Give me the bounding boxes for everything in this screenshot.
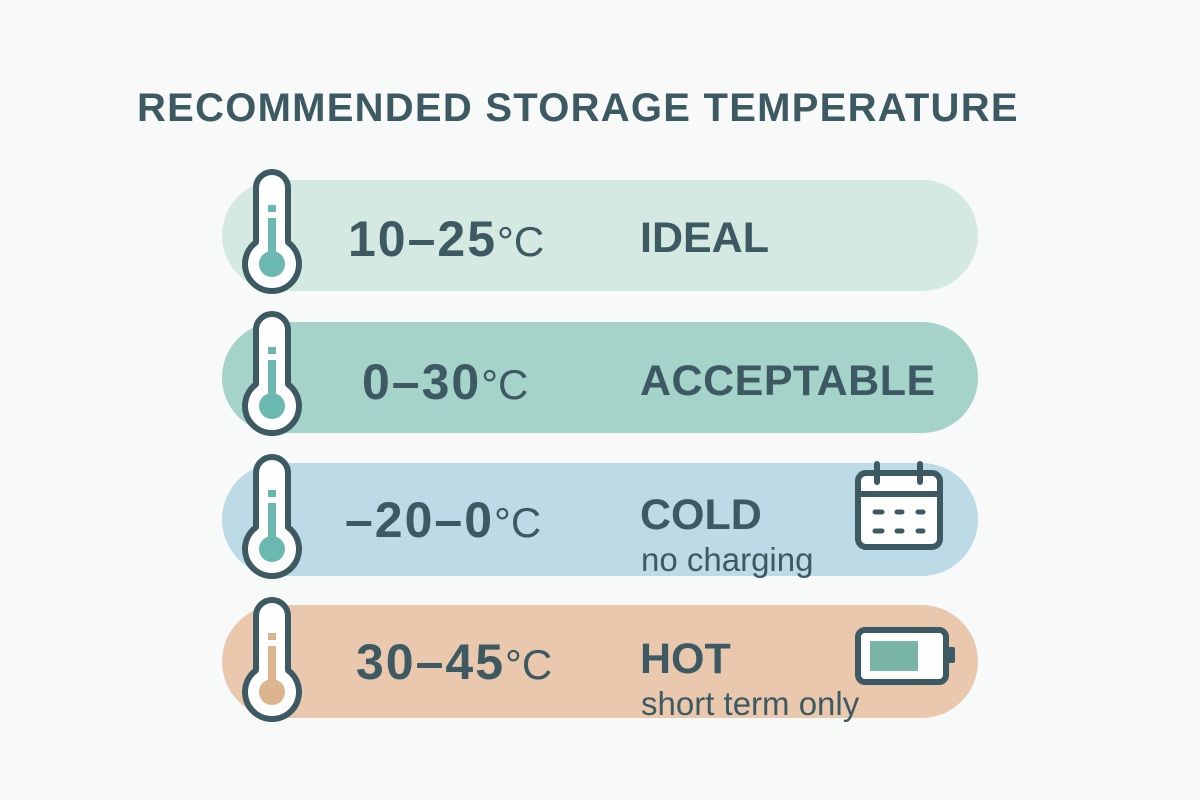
icon: thermometer hot	[245, 600, 299, 719]
temperature: 30–45°C: 30–45°C	[356, 634, 552, 690]
subtext: no charging: no charging	[641, 541, 813, 578]
row: cold	[222, 457, 978, 578]
temperature: 10–25°C: 10–25°C	[348, 211, 544, 267]
row: ideal	[222, 172, 978, 291]
icon: thermometer acceptable	[245, 314, 299, 433]
label: IDEAL: IDEAL	[640, 214, 769, 262]
temperature: 0–30°C: 0–30°C	[362, 354, 528, 410]
label: ACCEPTABLE: ACCEPTABLE	[640, 357, 936, 405]
icon: calendar	[858, 464, 940, 547]
title: RECOMMENDED STORAGE TEMPERATURE	[137, 86, 1019, 130]
subtext: short term only: short term only	[641, 685, 860, 722]
row: hot	[222, 600, 978, 722]
row: acceptable	[222, 314, 978, 433]
label: COLD: COLD	[640, 491, 762, 539]
icon: battery	[858, 630, 955, 682]
temperature: −20–0°C: –20–0°C	[345, 492, 541, 548]
icon: thermometer cold	[245, 457, 299, 576]
icon: thermometer ideal	[245, 172, 299, 291]
label: HOT: HOT	[640, 635, 731, 683]
